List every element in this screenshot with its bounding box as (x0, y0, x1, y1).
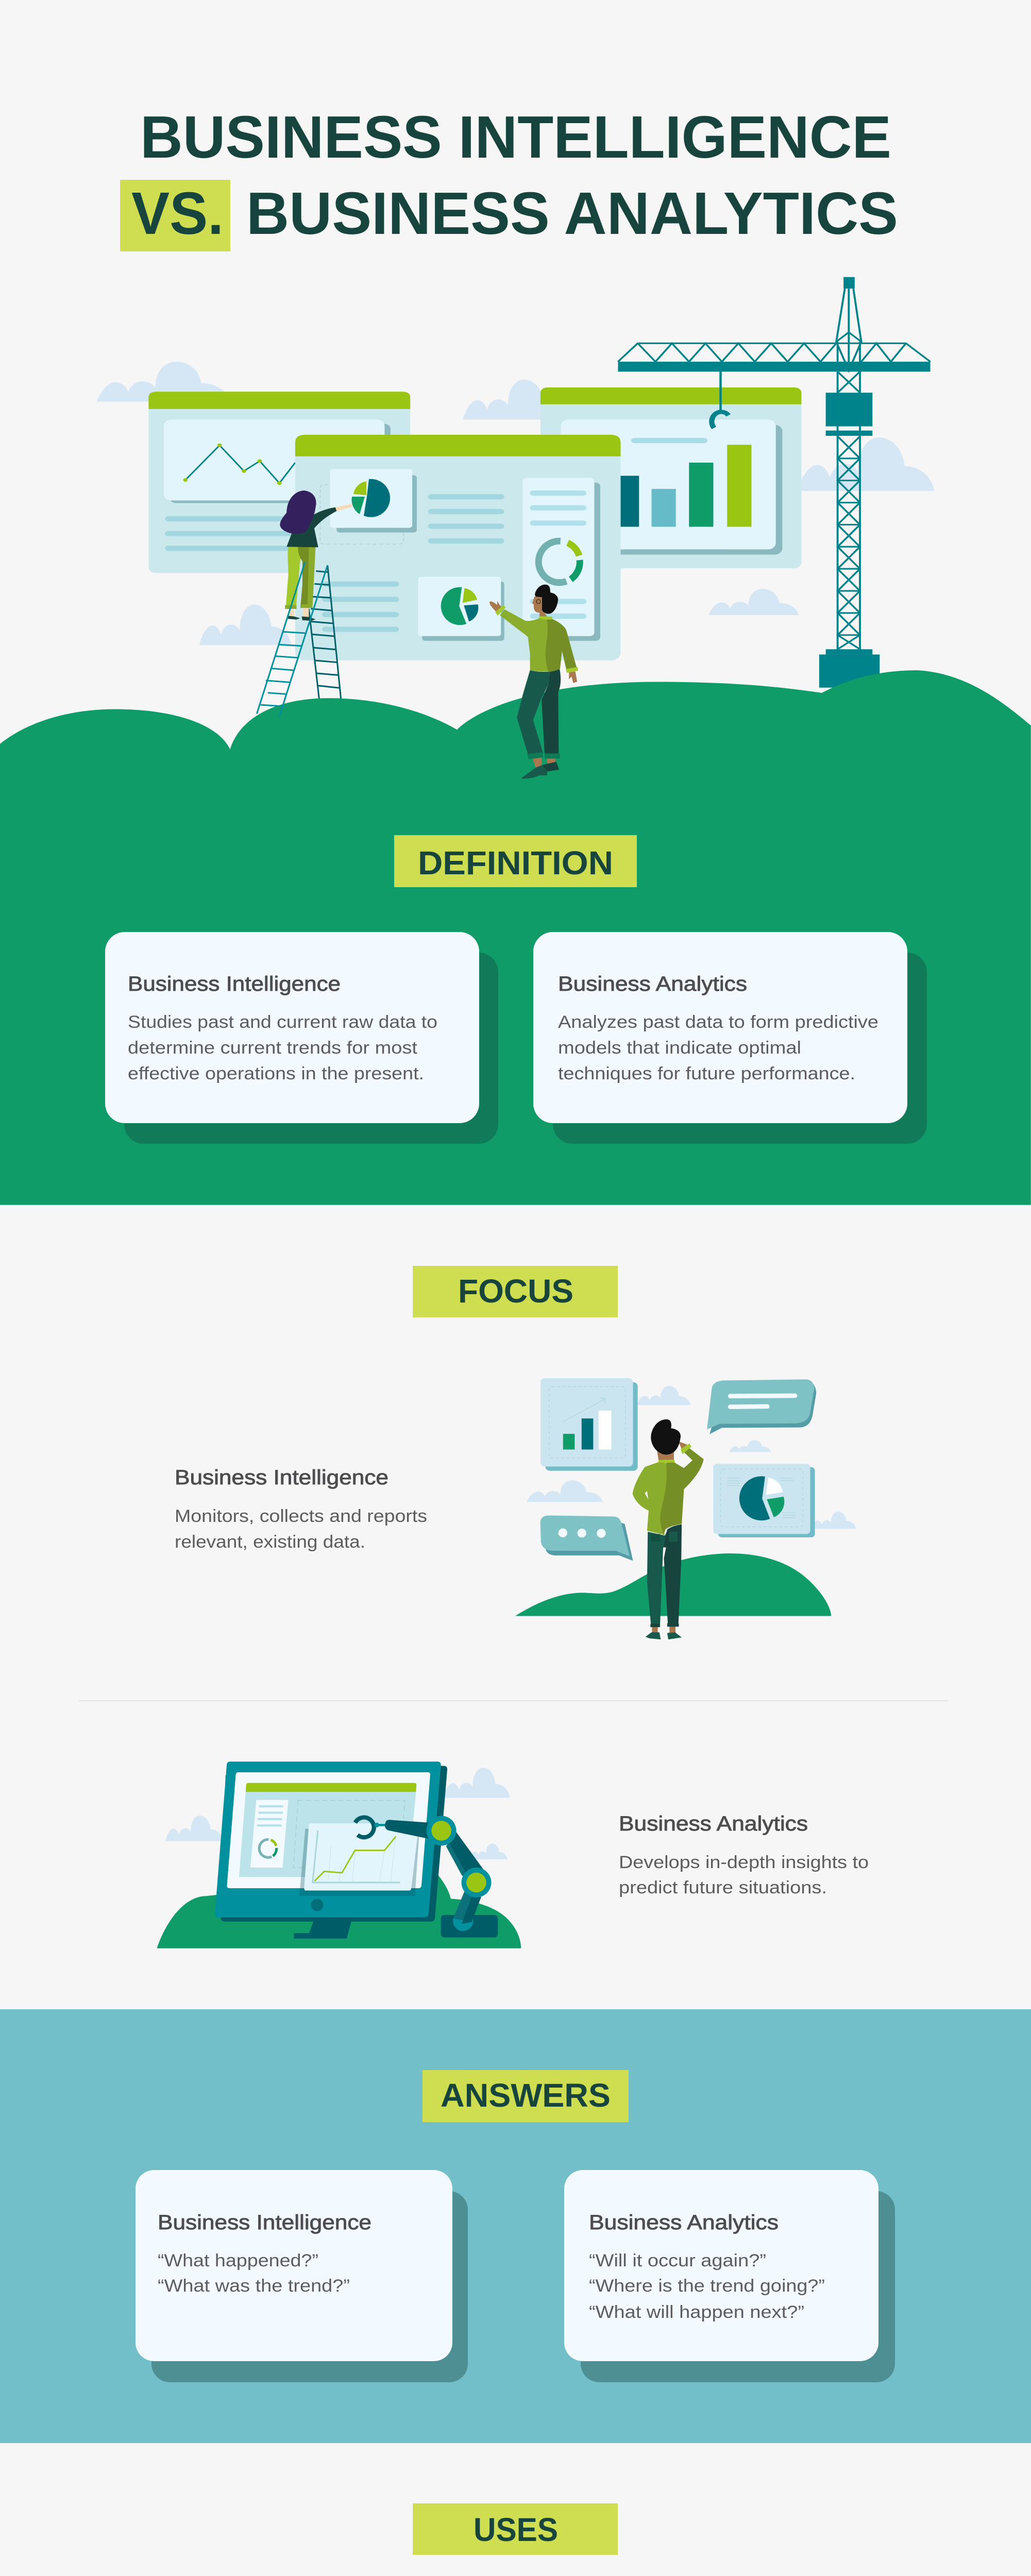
text: business intelligence focus: relevant, existing data. (175, 1532, 365, 1552)
label: uses (413, 2503, 618, 2555)
text: business intelligence focus: Business Intelligence (175, 1466, 388, 1489)
man from behind (633, 1419, 704, 1639)
answers band (0, 2009, 1031, 2443)
title line 1: BUSINESS INTELLIGENCE (140, 104, 891, 171)
label: uses: USES (474, 2511, 558, 2548)
hero pie chart: top (351, 479, 390, 517)
label: definition: DEFINITION (418, 844, 613, 882)
clouds (165, 1768, 510, 1859)
card: business analytics definition: Business Analytics (558, 973, 747, 995)
card: business intelligence answers: “What happened?” (158, 2251, 318, 2270)
card: business analytics definition: Analyzes past data to form predictive (558, 1012, 878, 1032)
title highlight: VS. (120, 180, 230, 251)
label: answers (422, 2070, 629, 2122)
card: business analytics answers: “Will it occur again?” (589, 2251, 766, 2270)
hill (515, 1553, 831, 1616)
label: answers: ANSWERS (441, 2077, 611, 2114)
card: business intelligence definition (105, 932, 498, 1144)
card: business intelligence definition: Studies past and current raw data to (128, 1012, 437, 1032)
pie chart card (713, 1464, 815, 1537)
woman upper body (280, 490, 352, 547)
text: business analytics focus (619, 1812, 869, 1897)
center dashboard window (295, 435, 621, 660)
monitor (215, 1761, 447, 1939)
right dashboard window with bar chart (540, 387, 801, 568)
speech bubble: lines (707, 1379, 816, 1434)
text: business analytics focus: Develops in-depth insights to (619, 1853, 869, 1872)
ladder: back (309, 565, 341, 699)
speech bubble: dots (540, 1515, 633, 1561)
card: business intelligence answers: “What was the trend?” (158, 2276, 350, 2296)
section: answers (0, 2009, 1031, 2443)
text: business analytics focus: predict future situations. (619, 1878, 827, 1897)
ladder: front (257, 562, 328, 716)
text: business analytics focus: Business Analytics (619, 1812, 808, 1835)
card: business analytics definition (533, 932, 927, 1144)
text: business intelligence focus (175, 1466, 427, 1552)
lower pie chart (441, 587, 478, 625)
card: business intelligence definition: Business Intelligence (128, 973, 341, 995)
card: business analytics answers (564, 2170, 895, 2382)
hero illustration: dashboards, crane and people (0, 277, 1031, 1205)
green hills and definition background (0, 670, 1031, 1205)
section: uses (81, 2503, 950, 2576)
donut chart (538, 541, 580, 583)
hero background panels and crane (97, 277, 934, 688)
title (120, 104, 898, 251)
card: business analytics definition: models that indicate optimal (558, 1038, 801, 1058)
clouds (527, 1386, 856, 1529)
text: business intelligence focus: Monitors, collects and reports (175, 1506, 427, 1526)
hill (157, 1870, 521, 1948)
section: focus (79, 1266, 948, 1948)
card: business analytics definition: techniques for future performance. (558, 1064, 855, 1083)
illustration: man reviewing charts (515, 1378, 856, 1639)
robotic arm (355, 1816, 498, 1937)
woman on ladder (285, 547, 315, 621)
man pointing at dashboard (489, 585, 578, 778)
card: business analytics answers: “Where is the trend going?” (589, 2276, 825, 2296)
crane (618, 277, 931, 688)
title line 2: BUSINESS ANALYTICS (246, 180, 898, 247)
section: definition (105, 835, 927, 1144)
card: business analytics answers: Business Analytics (589, 2211, 779, 2234)
people and details placed in close-up coordinates (257, 541, 580, 716)
floating chart card (299, 1823, 419, 1896)
left dashboard window with line chart (148, 392, 410, 573)
clouds (97, 362, 934, 645)
bar chart card (540, 1378, 638, 1471)
title VS. text: VS. (131, 180, 224, 247)
card: business intelligence answers (136, 2170, 468, 2382)
card: business intelligence definition: effective operations in the present. (128, 1064, 424, 1083)
illustration: monitor with robotic arm (157, 1761, 521, 1948)
card: business analytics answers: “What will happen next?” (589, 2302, 804, 2322)
label: focus (413, 1266, 618, 1317)
card: business intelligence answers: Business Intelligence (158, 2211, 371, 2234)
label: focus: FOCUS (458, 1273, 573, 1310)
label: definition (394, 835, 637, 887)
card: business intelligence definition: determine current trends for most (128, 1038, 418, 1058)
